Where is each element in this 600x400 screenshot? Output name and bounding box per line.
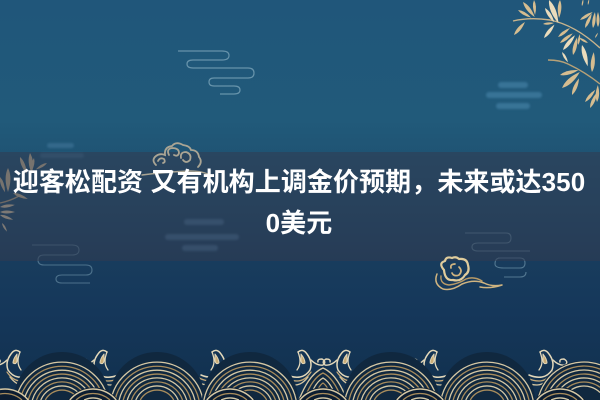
title: 0美元 [266,208,332,238]
icon: cloud outline behind title [142,143,208,175]
lower wave row [0,387,585,400]
wave crest curls [0,350,567,385]
back pointed wave [299,368,347,400]
thin meander line: lower right [465,233,530,277]
icon: gold auspicious cloud [436,257,502,289]
title: 迎客松配资 又有机构上调金价预期，未来或达350 [13,167,585,197]
title [13,167,585,238]
icon: bamboo top right [513,0,600,109]
thin meander line: lower left [32,245,92,283]
soft cloud bars: upper left [40,143,84,158]
icon: bamboo left edge [0,153,48,232]
thin meander line: top centre [178,51,254,94]
front wave row [14,352,600,400]
soft cloud bars: centre left [165,219,239,251]
soft cloud bars: upper right [486,82,542,109]
title band [0,152,600,261]
